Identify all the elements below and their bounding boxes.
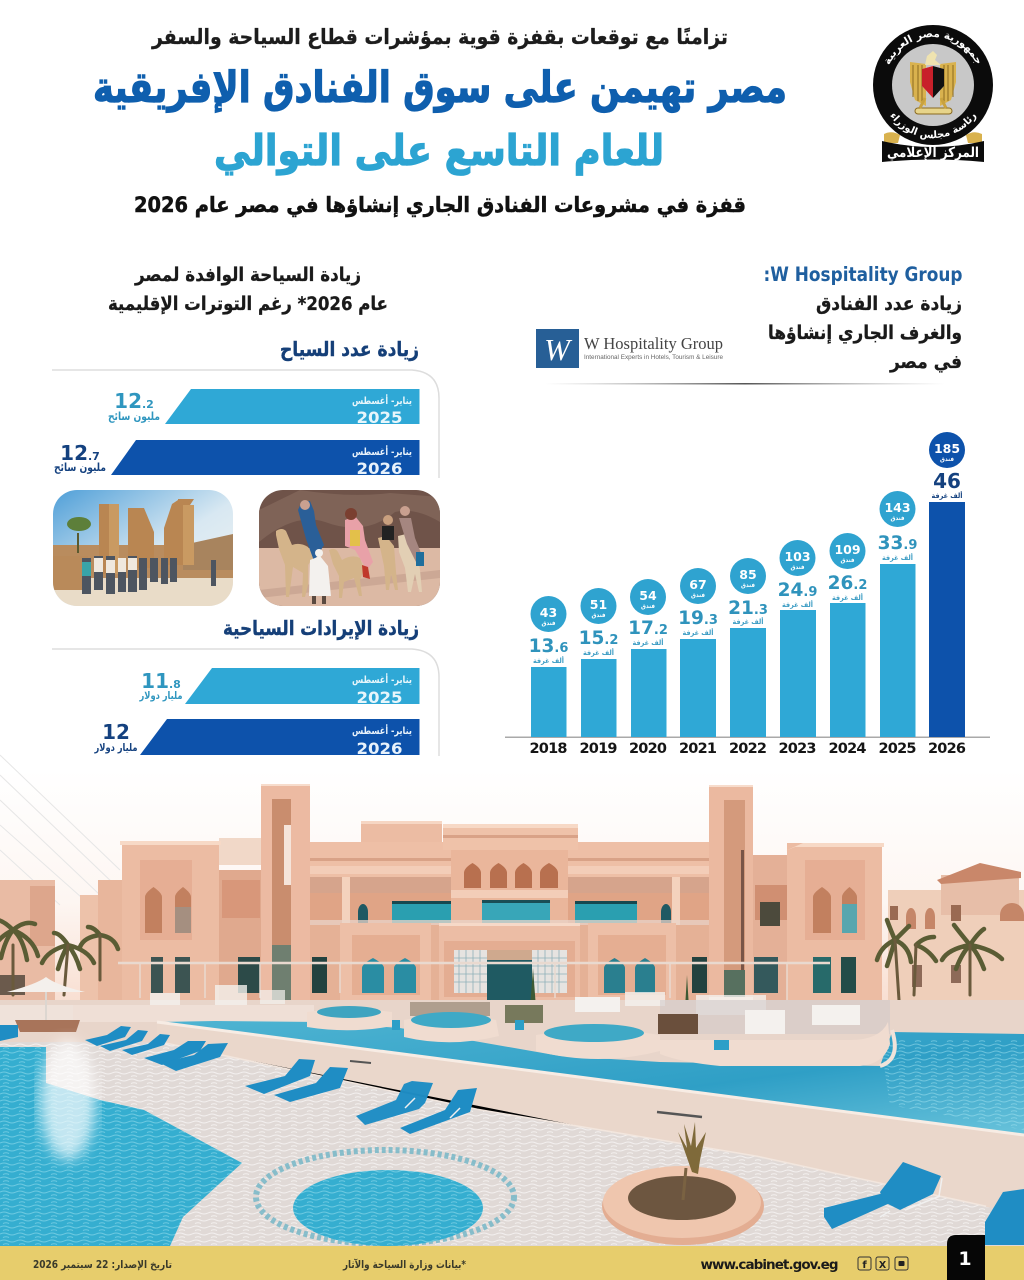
2018: ألف غرفة bbox=[533, 656, 564, 665]
2025 bbox=[878, 491, 917, 757]
bar 2025: 2025 bbox=[356, 688, 402, 707]
icon: x bbox=[876, 1257, 889, 1271]
heading: زيادة الإيرادات السياحية bbox=[223, 616, 419, 640]
2018: 2018 bbox=[530, 741, 568, 757]
logo: W Hospitality Group bbox=[536, 329, 723, 368]
2023: 103 bbox=[784, 549, 811, 564]
2026: 185 bbox=[934, 441, 960, 456]
2019: فندق bbox=[592, 612, 606, 619]
value 12: 12 bbox=[102, 720, 130, 744]
2018: 43 bbox=[540, 605, 557, 620]
value 12.7 bbox=[54, 441, 106, 474]
value 11.8: مليار دولار bbox=[139, 690, 182, 702]
2024 bbox=[828, 533, 867, 757]
bar 2026 bbox=[111, 440, 420, 478]
left pool bbox=[0, 1047, 242, 1246]
icon: facebook: f bbox=[862, 1260, 867, 1271]
2019: ألف غرفة bbox=[583, 648, 614, 657]
ground floor bbox=[310, 923, 709, 1000]
bar 2026: يناير- أغسطس bbox=[352, 724, 412, 737]
furniture bbox=[150, 985, 766, 1015]
2021: 19.3 bbox=[678, 608, 718, 629]
2025: 2025 bbox=[878, 741, 916, 757]
2022: 2022 bbox=[729, 741, 767, 757]
2020 bbox=[628, 579, 668, 757]
icon: facebook bbox=[858, 1257, 871, 1271]
2019: 2019 bbox=[580, 741, 618, 757]
publication date: تاريخ الإصدار: 22 سبتمبر 2026 bbox=[33, 1259, 172, 1271]
2019: 15.2 bbox=[579, 628, 618, 649]
far right building bbox=[888, 863, 1024, 1005]
main upper wall bbox=[310, 842, 709, 878]
heading: inbound tourism: زيادة السياحة الوافدة لمصر bbox=[134, 264, 361, 286]
left wing bbox=[120, 841, 221, 1000]
heading: inbound tourism bbox=[108, 264, 388, 315]
emblem banner text: المركز الإعلامي bbox=[887, 145, 979, 161]
heading: intro line: تزامنًا مع توقعات بقفزة قوية بمؤشرات قطاع السياحة والسفر bbox=[151, 25, 728, 49]
icon: youtube bbox=[895, 1257, 908, 1270]
2021: فندق bbox=[691, 592, 705, 599]
logo: W Hospitality Group: W bbox=[544, 332, 573, 367]
far left buildings bbox=[0, 880, 124, 1005]
footer bar bbox=[0, 1235, 1024, 1280]
panel: tourist numbers bbox=[52, 337, 439, 478]
2025: ألف غرفة bbox=[882, 553, 913, 562]
jacuzzi terraces bbox=[307, 1006, 890, 1066]
description line 1: زيادة عدد الفنادق bbox=[816, 293, 962, 315]
photo: hotel and pool bbox=[0, 755, 1024, 1246]
photo: camel riders in desert bbox=[259, 490, 440, 606]
shallow pool bbox=[0, 1042, 1024, 1246]
value 12.7: 12.7 bbox=[60, 441, 100, 465]
bar chart: hotels and rooms under construction bbox=[505, 432, 990, 757]
page number tab bbox=[947, 1235, 985, 1280]
2020: ألف غرفة bbox=[632, 638, 664, 647]
2023: فندق bbox=[790, 564, 805, 571]
2024: 2024 bbox=[828, 741, 866, 757]
second level bbox=[310, 877, 709, 927]
subtitle: قفزة في مشروعات الفنادق الجاري إنشاؤها في مصر عام 2026 bbox=[134, 193, 746, 218]
2024: ألف غرفة bbox=[832, 593, 863, 602]
sky bbox=[0, 770, 1024, 1010]
description line 2: والغرف الجاري إنشاؤها bbox=[768, 322, 962, 345]
fence bbox=[118, 962, 830, 964]
logo: W Hospitality Group: W Hospitality Group bbox=[584, 334, 723, 353]
circular mosaic bbox=[256, 1150, 514, 1246]
2019 bbox=[579, 588, 618, 757]
bar 2026: 2026 bbox=[356, 459, 402, 478]
2022: فندق bbox=[741, 582, 755, 589]
emblem top arc text: جمهورية مصر العربية bbox=[885, 33, 980, 64]
value 12: مليار دولار bbox=[94, 742, 138, 754]
2020: 2020 bbox=[629, 741, 667, 757]
2024: فندق bbox=[840, 557, 855, 564]
2018: فندق bbox=[542, 620, 556, 627]
value 12.2 bbox=[108, 389, 160, 423]
2024: 109 bbox=[834, 542, 861, 557]
description line 3: في مصر bbox=[889, 351, 962, 373]
2026 bbox=[928, 432, 966, 757]
pool edge band bbox=[157, 1022, 1024, 1212]
bar 2026: 2026 bbox=[356, 739, 402, 758]
bar 2025: يناير- أغسطس bbox=[352, 673, 412, 686]
2020: 17.2 bbox=[628, 618, 668, 639]
value 12.2: 12.2 bbox=[114, 389, 154, 413]
palm trees bbox=[0, 920, 1002, 1000]
2021: 67 bbox=[689, 577, 707, 592]
2025: 143 bbox=[884, 500, 911, 515]
heading: inbound tourism: عام 2026* رغم التوترات الإقليمية bbox=[108, 293, 388, 315]
towers bbox=[261, 784, 753, 1004]
2026: 46 bbox=[933, 469, 961, 493]
2018: 13.6 bbox=[529, 636, 568, 657]
2022: 85 bbox=[739, 567, 757, 582]
bar 2025 bbox=[185, 668, 420, 707]
panel: W Hospitality heading and text bbox=[764, 263, 963, 373]
bar 2026: يناير- أغسطس bbox=[352, 445, 412, 458]
heading: زيادة عدد السياح bbox=[280, 337, 419, 361]
2022: 21.3 bbox=[728, 598, 768, 619]
bar 2025 bbox=[165, 389, 420, 427]
value 11.8: 11.8 bbox=[141, 669, 181, 693]
logo: media center emblem bbox=[873, 25, 993, 162]
2022 bbox=[728, 558, 768, 757]
right wing bbox=[785, 843, 884, 1000]
value 12.2: مليون سائح bbox=[108, 410, 160, 423]
bar 2025: 2025 bbox=[356, 408, 402, 427]
title: second line: للعام التاسع على التوالي bbox=[214, 126, 664, 176]
2022: ألف غرفة bbox=[732, 617, 764, 626]
panel: tourism revenue bbox=[52, 616, 439, 758]
2025: 33.9 bbox=[878, 533, 917, 554]
value 11.8 bbox=[139, 669, 182, 702]
emblem bottom arc text: رئاسة مجلس الوزراء bbox=[890, 114, 976, 140]
2024: 26.2 bbox=[828, 573, 867, 594]
2026: فندق bbox=[940, 456, 954, 463]
loungers bbox=[0, 1025, 1024, 1245]
2021: ألف غرفة bbox=[682, 628, 714, 637]
brand heading: :W Hospitality Group bbox=[764, 263, 963, 286]
source note: *بيانات وزارة السياحة والآثار bbox=[342, 1258, 466, 1271]
umbrella and planter seats bbox=[7, 977, 85, 992]
planter with palm bbox=[602, 1122, 764, 1245]
side sections bbox=[219, 870, 264, 1000]
2020: 54 bbox=[639, 588, 657, 603]
page number tab: 1 bbox=[958, 1248, 972, 1270]
2021: 2021 bbox=[679, 741, 717, 757]
title: main: مصر تهيمن على سوق الفنادق الإفريقية bbox=[93, 63, 787, 113]
upper pool bbox=[157, 1021, 1024, 1135]
2021 bbox=[678, 568, 718, 757]
value 12 bbox=[94, 720, 138, 754]
icon: x: X bbox=[879, 1260, 887, 1271]
center block with arches bbox=[451, 850, 568, 925]
2023: 2023 bbox=[778, 741, 816, 757]
icon: eagle bbox=[910, 51, 956, 114]
2025: فندق bbox=[890, 515, 905, 522]
2018 bbox=[529, 596, 568, 757]
bar 2025: يناير- أغسطس bbox=[352, 394, 412, 407]
2026: ألف غرفة bbox=[932, 491, 962, 500]
logo: W Hospitality Group: International Experts in Hotels, Tourism & Leisure bbox=[584, 354, 723, 361]
value 12.7: مليون سائح bbox=[54, 461, 106, 474]
2019: 51 bbox=[590, 597, 607, 612]
deck base bbox=[0, 1000, 1024, 1246]
2023: 24.9 bbox=[778, 580, 817, 601]
bar 2026 bbox=[140, 719, 420, 758]
2023: ألف غرفة bbox=[782, 600, 813, 609]
photo: Karnak temple tourists bbox=[53, 490, 233, 606]
website: www.cabinet.gov.eg bbox=[700, 1257, 838, 1273]
2026: 2026 bbox=[928, 741, 966, 757]
2020: فندق bbox=[641, 603, 655, 610]
2023 bbox=[778, 540, 817, 757]
